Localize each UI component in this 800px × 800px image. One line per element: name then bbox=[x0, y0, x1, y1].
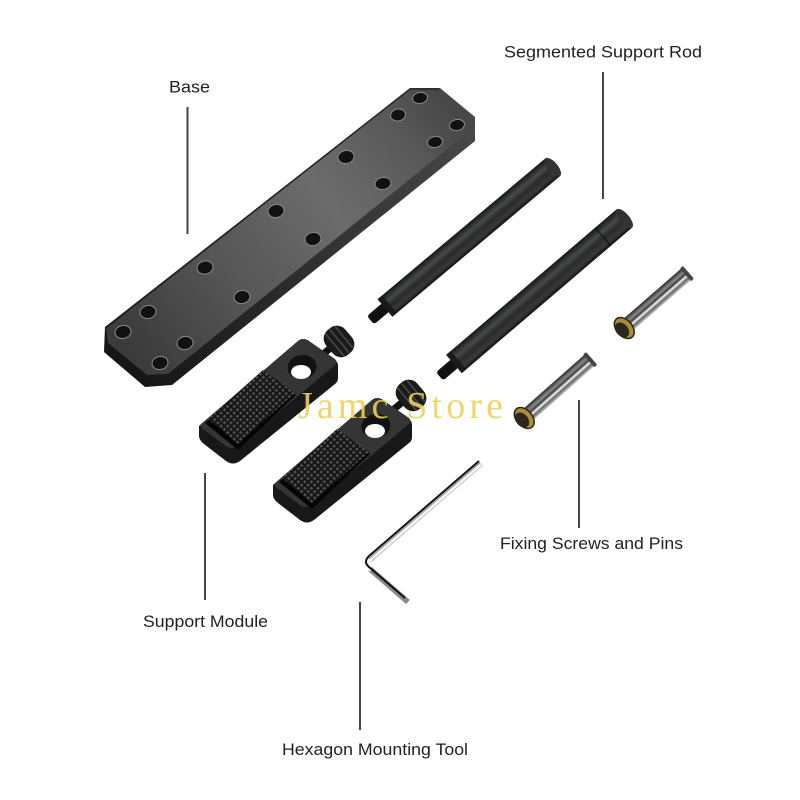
through hole bbox=[286, 353, 318, 381]
support module: left bbox=[199, 321, 359, 464]
label: Hexagon Mounting Tool: Hexagon Mounting Tool bbox=[282, 740, 468, 759]
fixing screw: upper bbox=[610, 263, 696, 343]
leader line: Base bbox=[186, 107, 188, 234]
knurled grip bbox=[279, 429, 370, 509]
thumb knob bbox=[384, 375, 431, 422]
through hole bbox=[360, 412, 392, 440]
fixing screw: lower bbox=[510, 349, 600, 433]
segmented support rod: lower bbox=[432, 206, 636, 385]
knurled grip bbox=[205, 370, 296, 450]
leader line: Hexagon Mounting Tool bbox=[359, 602, 361, 730]
label: Support Module: Support Module bbox=[143, 612, 268, 631]
segmented support rod: upper bbox=[363, 155, 564, 329]
plate mounting holes bbox=[114, 91, 465, 371]
thumb knob bbox=[312, 321, 359, 368]
leader line: Support Module bbox=[204, 473, 206, 600]
hexagon mounting tool bbox=[366, 461, 481, 602]
leader line: Fixing Screws and Pins bbox=[578, 400, 580, 528]
watermark: Jamc Store bbox=[298, 385, 503, 427]
leader line: Segmented Support Rod bbox=[602, 72, 604, 199]
label: Fixing Screws and Pins: Fixing Screws and Pins bbox=[500, 534, 683, 553]
base plate bbox=[104, 88, 475, 387]
module body bbox=[199, 339, 338, 464]
label: Segmented Support Rod: Segmented Support Rod bbox=[504, 42, 702, 62]
module body bbox=[273, 398, 412, 522]
label: Base: Base bbox=[169, 78, 210, 96]
support module: right bbox=[273, 375, 431, 522]
